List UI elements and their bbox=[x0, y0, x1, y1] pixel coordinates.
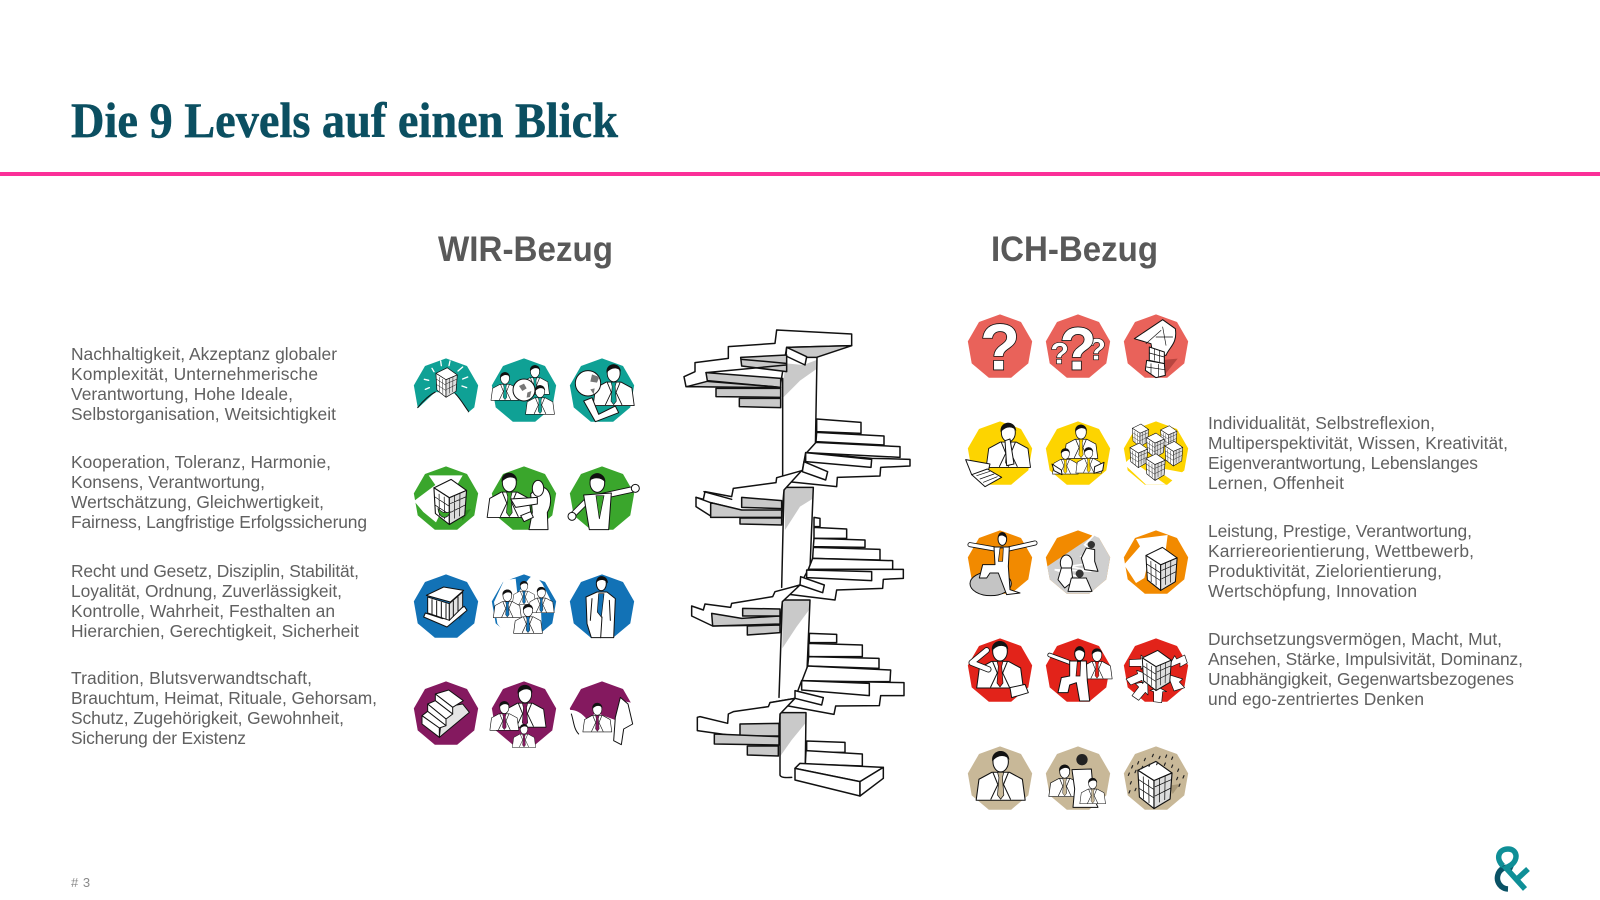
icon: building in rain of dots bbox=[1124, 746, 1188, 810]
icon row: ICH red bbox=[968, 638, 1188, 703]
icon row: WIR purple bbox=[414, 681, 639, 747]
icon: figures climbing stairs bbox=[1046, 530, 1110, 594]
text block: WIR level green: Wertschätzung, Gleichwertigkeit, bbox=[71, 492, 324, 512]
icon: team with laptops bbox=[1046, 421, 1110, 485]
text block: WIR level purple: Schutz, Zugehörigkeit, Gewohnheit, bbox=[71, 708, 344, 728]
text block: ICH level orange: Karriereorientierung, Wettbewerb, bbox=[1208, 541, 1474, 561]
icon row: WIR blue bbox=[414, 574, 634, 639]
text block: ICH level orange: Leistung, Prestige, Verantwortung, bbox=[1208, 521, 1472, 541]
text block: WIR level purple: Tradition, Blutsverwandtschaft, bbox=[71, 668, 312, 688]
text block: WIR level turquoise bbox=[71, 344, 337, 424]
spiral staircase illustration bbox=[684, 330, 910, 796]
text block: WIR level blue bbox=[71, 561, 359, 641]
text block: ICH level orange: Wertschöpfung, Innovation bbox=[1208, 581, 1417, 601]
icon: people around globe bbox=[491, 358, 556, 422]
text block: ICH level red: Durchsetzungsvermögen, Macht, Mut, bbox=[1208, 629, 1502, 649]
text block: WIR level blue: Kontrolle, Wahrheit, Festhalten an bbox=[71, 601, 335, 621]
icon: group at the edge bbox=[569, 681, 639, 747]
heading: WIR-Bezug: WIR-Bezug bbox=[438, 230, 613, 269]
text block: ICH level orange bbox=[1208, 521, 1474, 601]
icon: standing man bbox=[570, 574, 634, 638]
text block: ICH level yellow bbox=[1208, 413, 1508, 493]
icon: crowd of people bbox=[492, 574, 556, 639]
icon: smiling building with arrow bbox=[414, 466, 478, 530]
text block: WIR level blue: Loyalität, Ordnung, Zuverlässigkeit, bbox=[71, 581, 342, 601]
text block: WIR level purple: Sicherung der Existenz bbox=[71, 728, 246, 748]
icon: stone stairs bbox=[414, 681, 478, 745]
icon: building with arrow bbox=[1124, 530, 1188, 594]
icon: question mark bbox=[968, 311, 1032, 384]
icon: temple building bbox=[414, 574, 478, 638]
icon: building under arch bbox=[414, 358, 478, 424]
icon: three question marks bbox=[1046, 314, 1110, 383]
icon: three question marks: ? bbox=[1051, 338, 1069, 371]
icon: single man bbox=[968, 746, 1032, 810]
text block: WIR level green: Fairness, Langfristige Erfolgssicherung bbox=[71, 512, 367, 532]
icon: man holding globe bbox=[570, 358, 634, 422]
icon: man with open arms bbox=[568, 466, 639, 530]
text block: WIR level blue: Hierarchien, Gerechtigkeit, Sicherheit bbox=[71, 621, 359, 641]
text block: WIR level green: Kooperation, Toleranz, Harmonie, bbox=[71, 452, 331, 472]
icon: family group bbox=[490, 681, 556, 747]
text block: ICH level yellow: Lernen, Offenheit bbox=[1208, 473, 1344, 493]
text block: WIR level turquoise: Verantwortung, Hohe Ideale, bbox=[71, 384, 293, 404]
text block: ICH level yellow: Multiperspektivität, Wissen, Kreativität, bbox=[1208, 433, 1508, 453]
title: Die 9 Levels auf einen Blick bbox=[71, 92, 618, 148]
icon: building with arrows bbox=[1124, 638, 1188, 703]
icon: cluster of buildings bbox=[1124, 421, 1188, 485]
text block: WIR level purple: Brauchtum, Heimat, Rituale, Gehorsam, bbox=[71, 688, 377, 708]
heading: ICH-Bezug: ICH-Bezug bbox=[991, 230, 1158, 269]
text block: ICH level red: Unabhängigkeit, Gegenwartsbezogenes bbox=[1208, 669, 1514, 689]
icon: question-mark building bbox=[1124, 314, 1188, 378]
text block: ICH level red: und ego-zentriertes Denken bbox=[1208, 689, 1424, 709]
icon row: ICH coral bbox=[968, 311, 1188, 384]
text block: WIR level purple bbox=[71, 668, 377, 748]
icon row: WIR turquoise bbox=[414, 358, 634, 424]
text block: WIR level blue: Recht und Gesetz, Disziplin, Stabilität, bbox=[71, 561, 359, 581]
text block: ICH level yellow: Eigenverantwortung, Lebenslanges bbox=[1208, 453, 1478, 473]
icon row: WIR green bbox=[414, 466, 639, 530]
text block: WIR level turquoise: Komplexität, Unternehmerische bbox=[71, 364, 318, 384]
text block: WIR level green: Konsens, Verantwortung, bbox=[71, 472, 265, 492]
icon row: ICH beige bbox=[968, 746, 1188, 810]
icon: group from behind bbox=[1046, 746, 1110, 810]
page number: # 3 bbox=[71, 875, 91, 890]
icon: two pointing men bbox=[1046, 638, 1112, 702]
text block: WIR level turquoise: Selbstorganisation, Weitsichtigkeit bbox=[71, 404, 336, 424]
text block: ICH level red bbox=[1208, 629, 1523, 709]
icon: man standing on sack bbox=[968, 530, 1035, 596]
icon: question mark: ? bbox=[980, 311, 1020, 384]
title rule bbox=[0, 172, 1600, 176]
text block: WIR level turquoise: Nachhaltigkeit, Akzeptanz globaler bbox=[71, 344, 337, 364]
text block: ICH level orange: Produktivität, Zielorientierung, bbox=[1208, 561, 1442, 581]
icon row: ICH orange bbox=[968, 530, 1188, 596]
icon: man on phone with laptop bbox=[966, 421, 1032, 487]
text block: ICH level red: Ansehen, Stärke, Impulsivität, Dominanz, bbox=[1208, 649, 1523, 669]
icon: three question marks: ? bbox=[1060, 316, 1096, 383]
icon row: ICH yellow bbox=[966, 421, 1188, 487]
logo: ampersand bbox=[1497, 849, 1528, 889]
icon: three question marks: ? bbox=[1088, 334, 1106, 367]
icon: embracing couple bbox=[487, 466, 556, 530]
text block: WIR level green bbox=[71, 452, 367, 532]
text block: ICH level yellow: Individualität, Selbstreflexion, bbox=[1208, 413, 1435, 433]
icon: saluting man bbox=[968, 638, 1032, 702]
